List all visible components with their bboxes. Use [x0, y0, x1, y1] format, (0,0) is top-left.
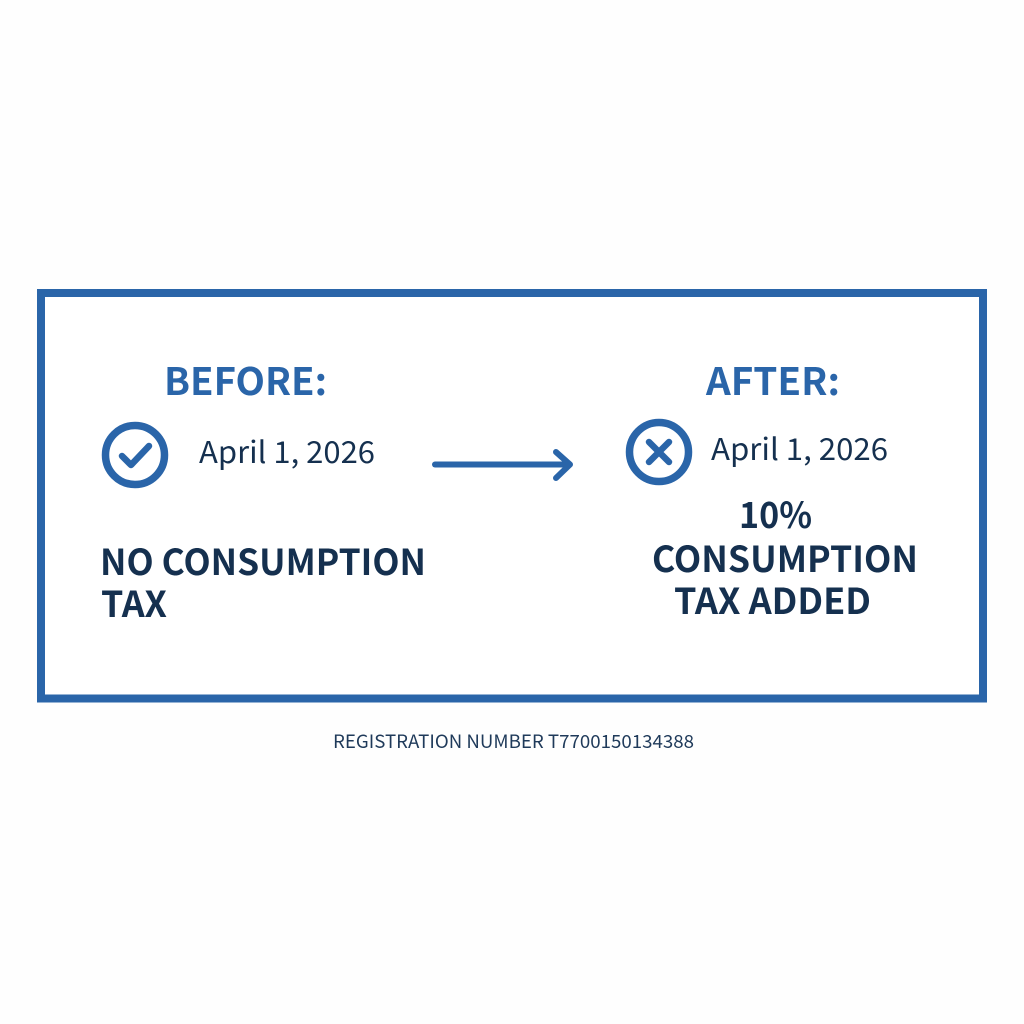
icon: check mark circle — [106, 426, 164, 484]
text: no consumption tax: TAX — [101, 576, 167, 628]
text: 10 percent consumption tax added: CONSUMPTION — [652, 531, 918, 583]
text: after date: April 1, 2026 — [711, 425, 888, 469]
icon: cross circle — [630, 422, 688, 482]
text: 10 percent consumption tax added: TAX ADDED — [674, 573, 871, 625]
text: registration number: REGISTRATION NUMBER T7700150134388 — [333, 728, 694, 754]
panel: before and after frame — [41, 293, 983, 698]
text: before date: April 1, 2026 — [199, 428, 375, 472]
text: 10 percent consumption tax added: 10% — [739, 487, 812, 539]
text: no consumption tax — [100, 534, 426, 628]
arrow: before to after — [435, 452, 570, 478]
text: 10 percent consumption tax added — [652, 487, 918, 625]
heading: after: AFTER: — [705, 351, 840, 406]
heading: before: BEFORE: — [164, 351, 327, 406]
text: no consumption tax: NO CONSUMPTION — [100, 534, 426, 586]
